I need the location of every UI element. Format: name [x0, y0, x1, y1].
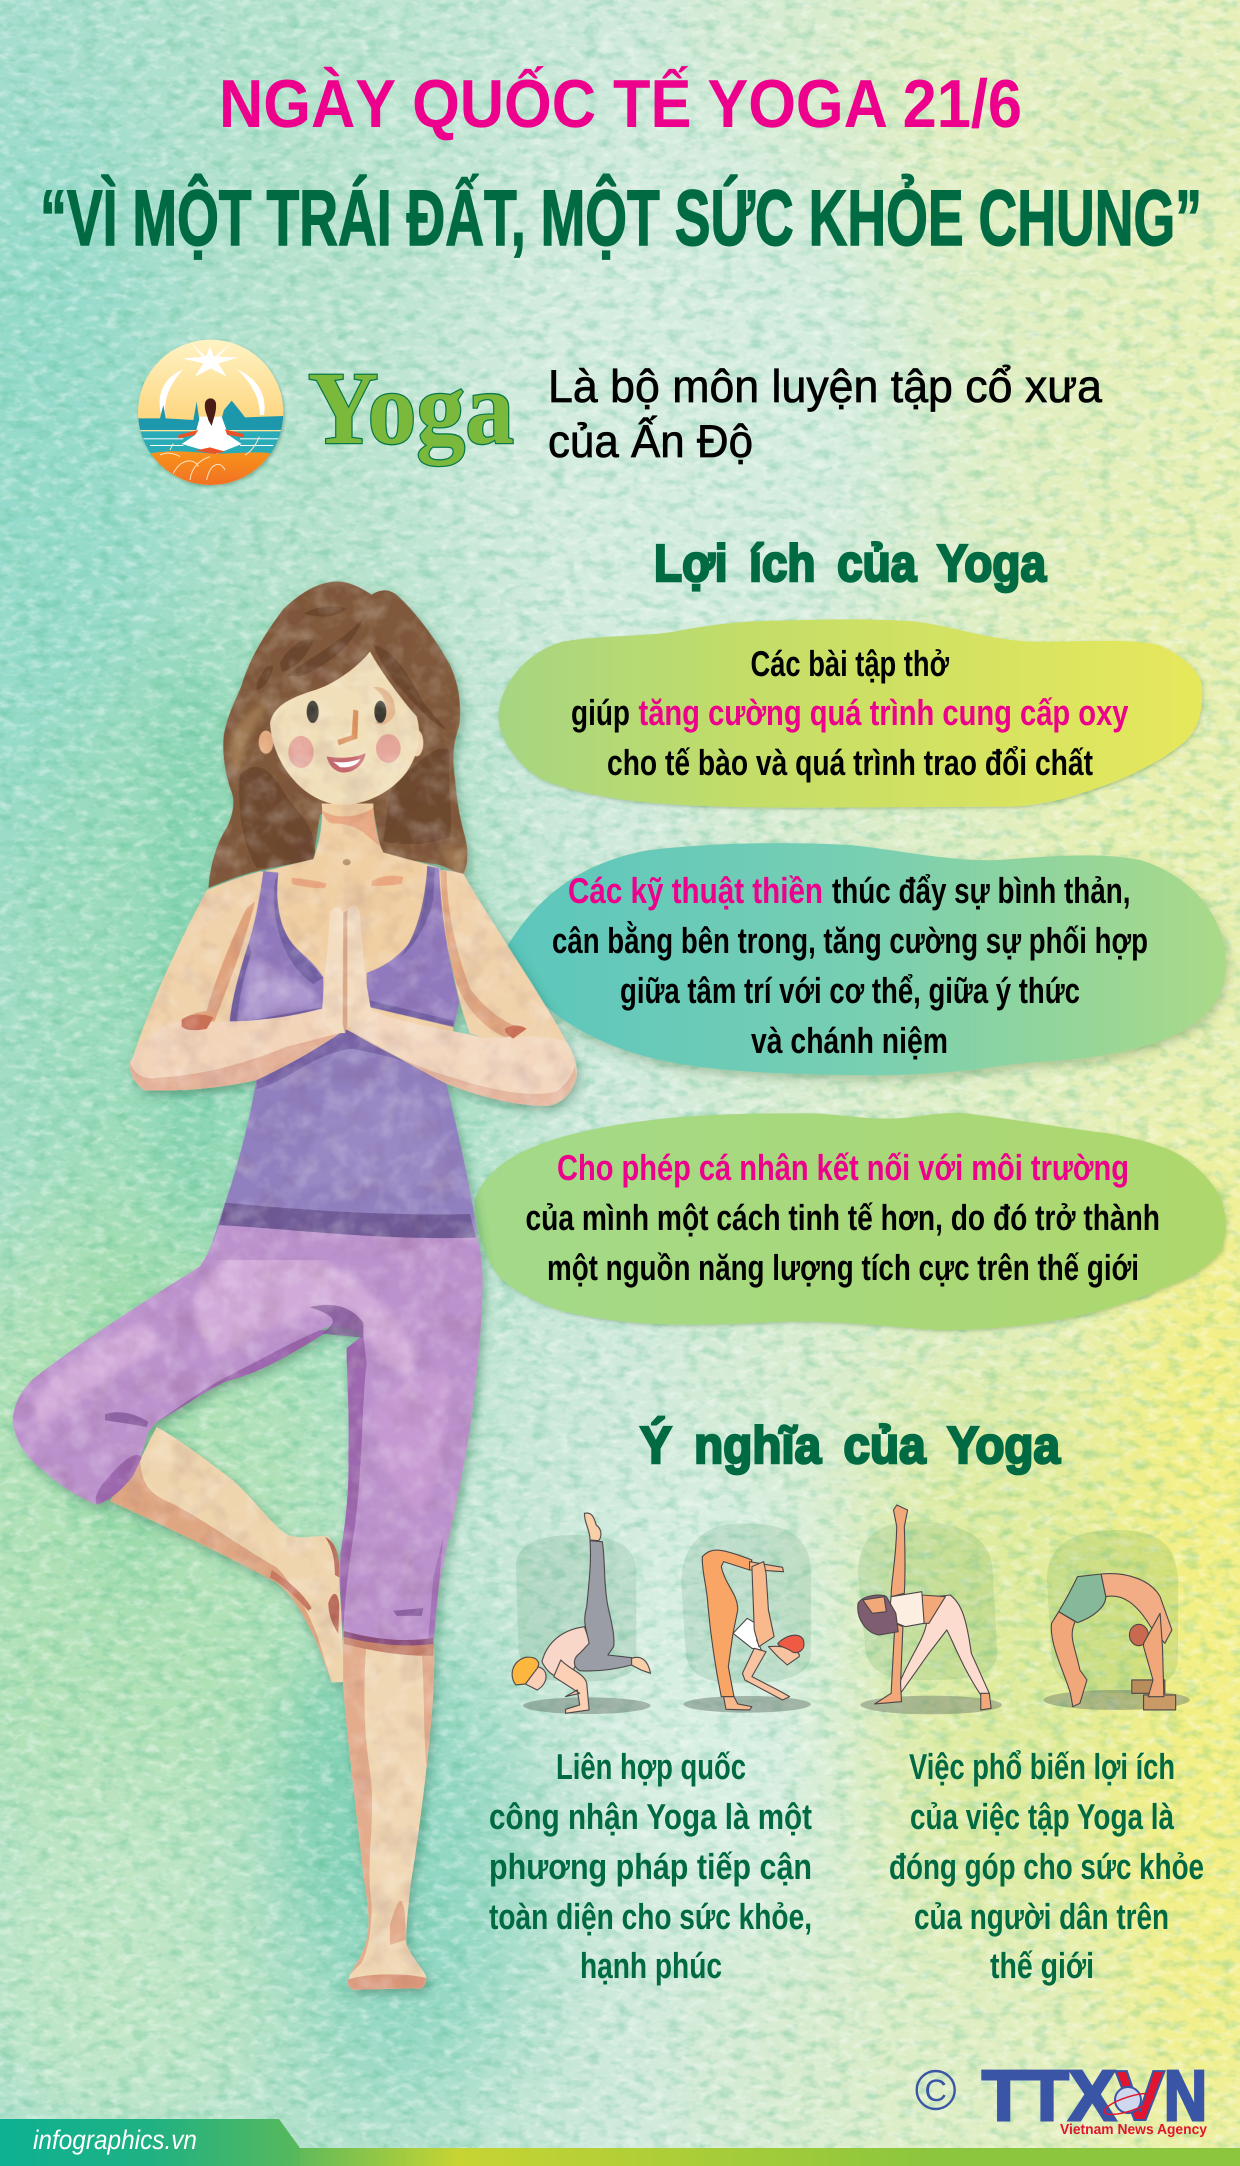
logo: TTXVN: N [1164, 2057, 1207, 2136]
face [259, 652, 423, 805]
footer bar [0, 2119, 1240, 2166]
panel: benefit 1: giúp [571, 692, 630, 733]
heading: benefits: Lợi ích của Yoga [654, 535, 1047, 593]
logo: TTXVN: V [1115, 2057, 1165, 2136]
panel: benefit 2: và chánh niệm [751, 1020, 948, 1061]
logo: TTXVN: TTX [982, 2057, 1116, 2136]
text block: spreading benefits: của người dân trên [914, 1896, 1169, 1937]
panel: benefit 2: giữa tâm trí với cơ thể, giữa ý thức [620, 970, 1080, 1011]
panel: benefit 2: thúc đẩy sự bình thản, [832, 870, 1130, 911]
logo word: Yoga: Yoga [308, 351, 514, 466]
purple tank top [207, 866, 478, 1260]
panel: benefit 2: Các kỹ thuật thiền [568, 870, 823, 911]
purple leggings [13, 1220, 483, 1645]
copyright icon [917, 2071, 955, 2109]
illustration: four yoga poses [512, 1505, 1190, 1714]
panel: benefit 1 [498, 619, 1202, 808]
text block: UN recognition: Liên hợp quốc [556, 1746, 746, 1787]
raised calf [110, 1427, 343, 1682]
pose 3: triangle [858, 1505, 1002, 1714]
text block: UN recognition: phương pháp tiếp cận [489, 1846, 812, 1887]
copyright icon: C [925, 2073, 947, 2108]
text block: spreading benefits: thế giới [990, 1945, 1094, 1986]
illustration: woman in tree pose [13, 581, 577, 1990]
panel: benefit 3 [475, 1113, 1226, 1330]
shoulders and upper arms [133, 870, 567, 1056]
upper body [130, 581, 577, 1260]
hair [208, 581, 467, 888]
title line 1: NGÀY QUỐC TẾ YOGA 21/6 [219, 66, 1022, 142]
logo: TTXVN [982, 2057, 1207, 2138]
panel: benefit 1: Các bài tập thở [750, 643, 949, 684]
text block: UN recognition: hạnh phúc [580, 1945, 722, 1986]
pose 4: backbend [1044, 1530, 1190, 1710]
intro text [548, 360, 1102, 467]
panel: benefit 1: tăng cường quá trình cung cấp oxy [638, 692, 1128, 733]
text block: spreading benefits [889, 1746, 1204, 1986]
text block: UN recognition: công nhận Yoga là một [489, 1796, 812, 1837]
panel: benefit 1: cho tế bào và quá trình trao đổi chất [607, 742, 1093, 783]
text block: UN recognition [489, 1746, 812, 1986]
standing leg [343, 1634, 434, 1990]
pose 2: standing split [681, 1523, 811, 1713]
heading: meaning: Ý nghĩa của Yoga [640, 1416, 1061, 1475]
lower body [13, 1220, 483, 1990]
pose 1: one-leg handstand [512, 1513, 650, 1714]
footer site name: infographics.vn [33, 2125, 197, 2155]
icon: yoga logo badge [137, 340, 287, 487]
logo: TTXVN: Vietnam News Agency [1060, 2122, 1207, 2138]
intro text: Là bộ môn luyện tập cổ xưa [548, 360, 1102, 412]
text block: UN recognition: toàn diện cho sức khỏe, [489, 1896, 812, 1937]
panel: benefit 2 [505, 843, 1226, 1075]
forearms and praying hands [130, 905, 577, 1106]
neck and chest [228, 803, 453, 1033]
intro text: của Ấn Độ [548, 415, 753, 467]
